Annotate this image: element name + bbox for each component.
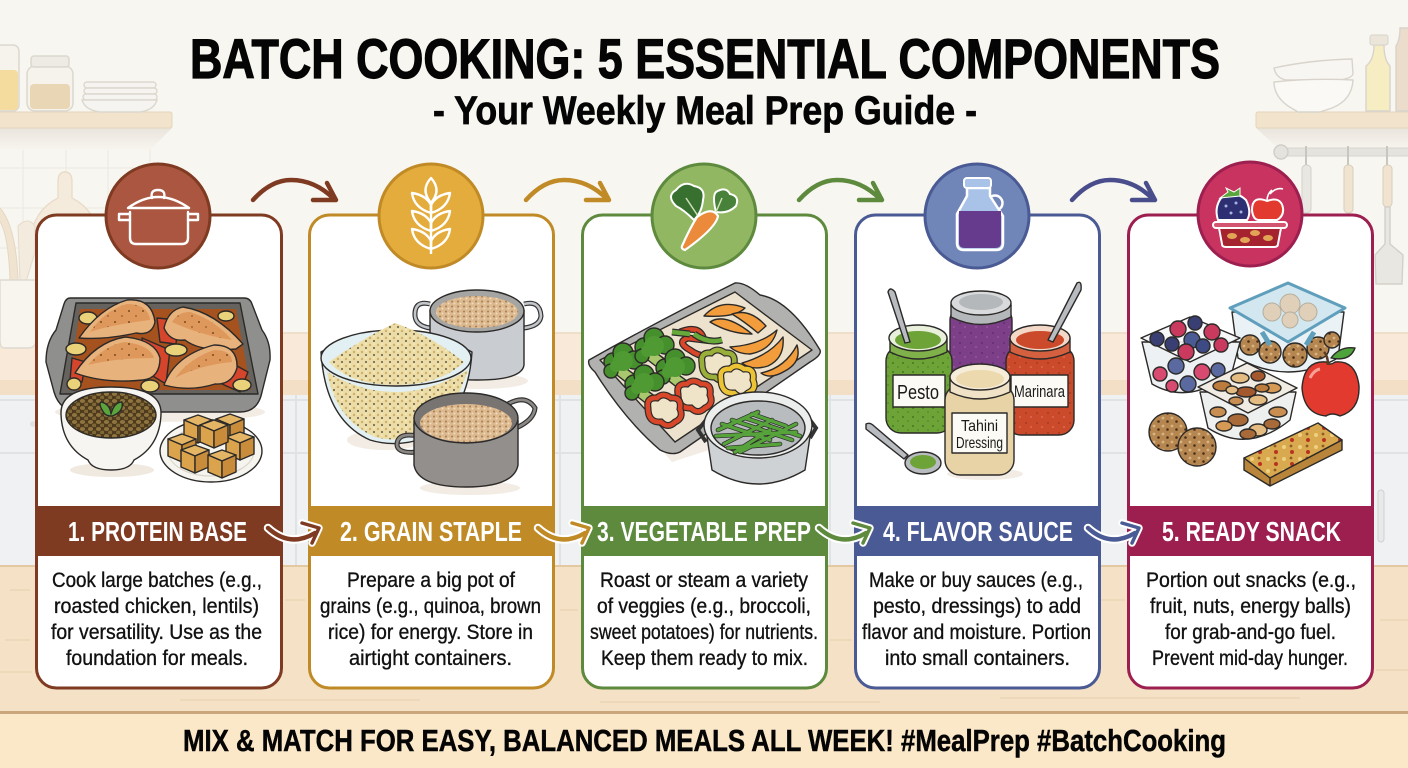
right shelf with bowls and bottles [1256,28,1408,128]
description: Roast or steam a variety [600,569,808,592]
icon: cooking pot [106,164,210,268]
card frame [310,215,554,688]
description: Prepare a big pot of [347,569,515,592]
description [590,569,818,670]
description: of veggies (e.g., broccoli, [597,595,811,618]
illustration: quinoa bowl and rice pots [321,290,541,495]
panel: ready snack [1127,215,1374,688]
illustration: roasted vegetables tray and green beans [589,283,820,484]
icon: greens and carrot [652,164,756,268]
panel: flavor sauce [854,215,1101,688]
arrow: band vegetable to sauce [819,523,870,543]
description: rice) for energy. Store in [328,621,533,644]
illustration: roasted chicken, lentils, tofu [46,298,270,482]
description: sweet potatoes) for nutrients. [590,621,818,644]
hanging rail and utensils [1274,145,1408,284]
heading: 1. PROTEIN BASE [68,516,247,547]
description: roasted chicken, lentils) [54,595,259,618]
arrow: vegetable to sauce [799,180,882,200]
description: airtight containers. [349,647,512,670]
arrow: band grain to vegetable [538,523,589,543]
counter backsplash band [0,332,1408,380]
illustration: snack containers, apple, energy balls, bar [1141,283,1359,486]
description: pesto, dressings) to add [873,595,1081,618]
panel: vegetable prep [581,215,828,688]
heading: 2. GRAIN STAPLE [340,516,522,547]
description [862,569,1091,670]
description [1146,569,1356,670]
heading: 4. FLAVOR SAUCE [883,516,1073,547]
panel: protein base [35,215,283,688]
arrow: band sauce to snack [1088,523,1139,543]
description: Prevent mid-day hunger. [1152,647,1348,670]
icon: sauce bottle [925,164,1029,268]
footer text: MIX & MATCH FOR EASY, BALANCED MEALS ALL WEEK! #MealPrep #BatchCooking [183,723,1226,758]
panel: grain staple [308,215,555,688]
subtitle: - Your Weekly Meal Prep Guide - [433,89,977,133]
header band [1127,506,1374,556]
title [190,27,1220,133]
header band [308,506,555,556]
arrow: sauce to snack [1072,180,1155,200]
description: flavor and moisture. Portion [862,621,1091,644]
header band [854,506,1101,556]
description: Cook large batches (e.g., [52,569,262,592]
description: for versatility. Use as the [51,621,262,644]
description: into small containers. [885,647,1070,670]
card frame [582,215,826,688]
illustration: sauce jars [866,282,1081,480]
description: foundation for meals. [66,647,248,670]
arrow: band protein to grain [268,523,319,543]
wood floor [0,565,1408,713]
left utensils, board and crock [0,172,100,348]
heading: 3. VEGETABLE PREP [597,516,811,547]
heading: 5. READY SNACK [1162,516,1341,547]
card frame [36,215,282,688]
icon: snack box [1198,162,1302,266]
description: Make or buy sauces (e.g., [869,569,1083,592]
description: Keep them ready to mix. [601,647,808,670]
card frame [856,215,1100,688]
illustration: sauce jars: Tahini [961,418,998,435]
footer banner [0,711,1408,768]
icon: wheat [379,164,483,268]
description: fruit, nuts, energy balls) [1150,595,1351,618]
illustration: sauce jars: Marinara [1014,382,1065,401]
arrow: protein to grain [253,180,336,200]
description: for grab-and-go fuel. [1165,621,1336,644]
header band [35,506,283,556]
header band [581,506,828,556]
illustration: sauce jars: Dressing [956,435,1003,452]
card frame [1128,215,1372,688]
arrow: grain to vegetable [526,180,609,200]
left shelf with jars and bowls [0,45,172,128]
illustration: sauce jars: Pesto [897,382,939,404]
description: Portion out snacks (e.g., [1146,569,1356,592]
description [320,569,541,670]
description: grains (e.g., quinoa, brown [320,595,541,618]
description [51,569,262,670]
cabinets [0,395,1408,565]
